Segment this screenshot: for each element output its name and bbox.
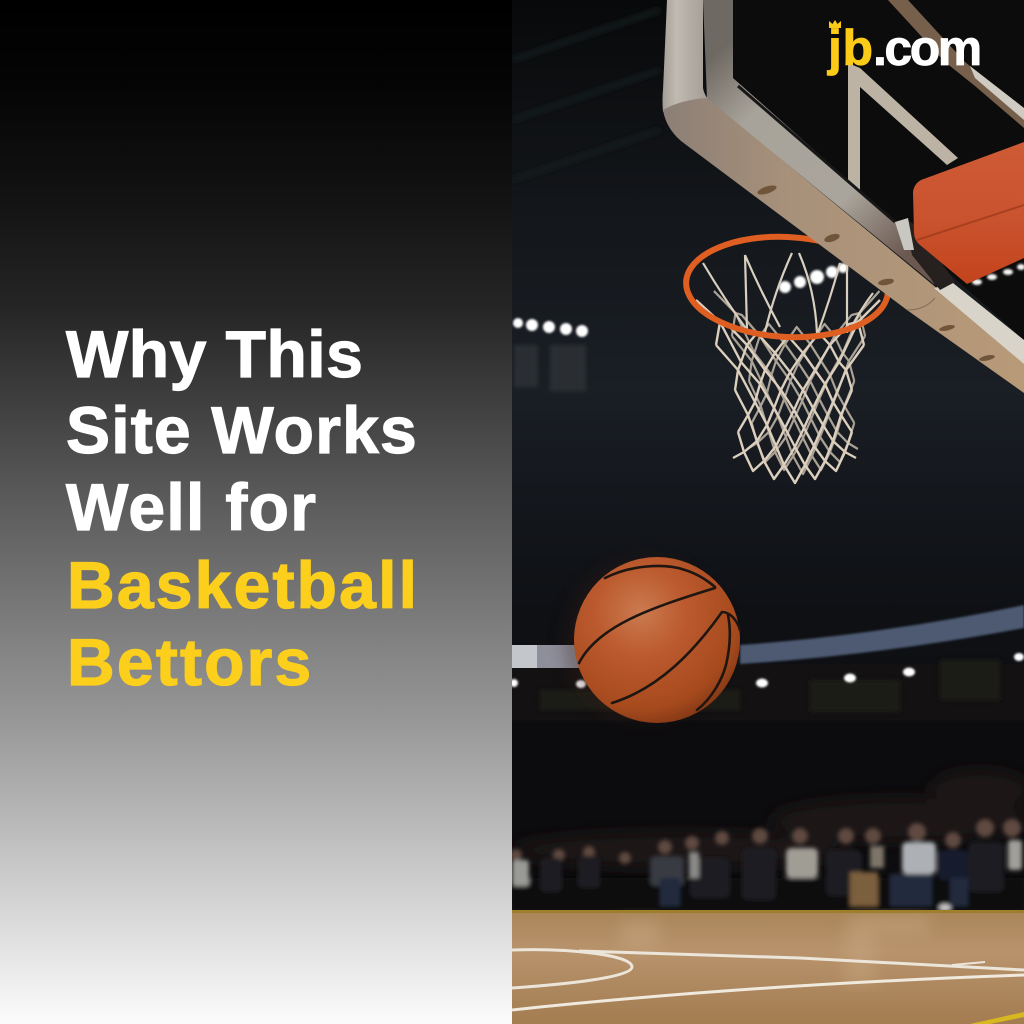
arena background <box>512 0 1024 1024</box>
backboard glass <box>733 0 1024 340</box>
left frame face <box>662 0 708 112</box>
title: Why This <box>66 317 363 391</box>
backboard padding <box>913 142 1024 284</box>
frame underside <box>663 98 1024 393</box>
title: Basketball <box>67 548 419 622</box>
title: Site Works <box>66 393 418 467</box>
basketball <box>563 557 740 723</box>
title: Well for <box>66 470 317 544</box>
arena ring band and balcony <box>510 605 1024 720</box>
ceiling beams <box>512 10 660 180</box>
metal band <box>703 0 935 285</box>
title: Bettors <box>67 625 313 699</box>
frame bolts <box>756 184 995 362</box>
dim ceiling lights under pad <box>972 264 1024 285</box>
arena lights left <box>513 318 588 391</box>
panel: gradient title panel <box>0 0 512 1024</box>
rim spotlights <box>779 263 848 293</box>
logo: jb <box>827 20 874 76</box>
title <box>65 317 419 699</box>
backboard <box>662 0 1024 393</box>
court floor <box>512 910 1024 1024</box>
hoop rim and net <box>684 232 890 483</box>
upper brace <box>888 0 1024 128</box>
crowd <box>510 722 1024 912</box>
inner square marking <box>848 63 958 190</box>
rim clamp <box>905 218 955 290</box>
panel: arena photo scene <box>512 0 1024 1024</box>
logo <box>827 20 980 76</box>
logo: .com <box>873 20 980 76</box>
